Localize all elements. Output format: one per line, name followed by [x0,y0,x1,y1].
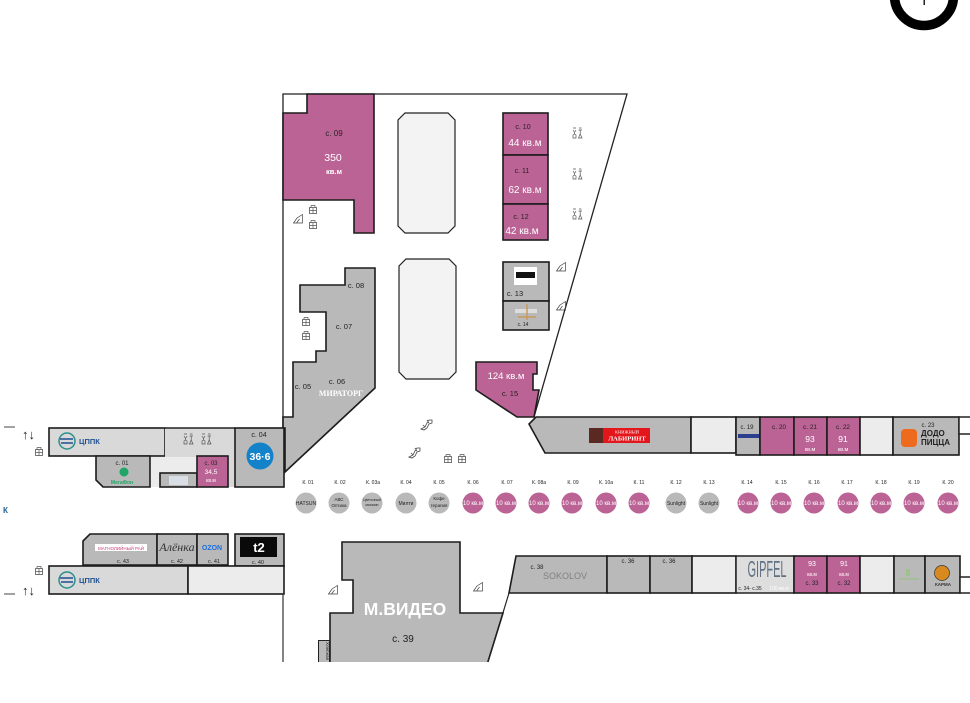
panel: c.34-c.35 Gipfel: 100 кв.м [769,586,789,592]
panel: c.09 [283,94,374,233]
panel: kiosks row: Кофе [433,496,445,501]
panel: kiosks row: 10 кв.м [463,501,483,507]
panel: c.10 [503,113,548,155]
panel: kiosks row: К. 01 [302,480,314,486]
panel: kiosks row: К. 10а [599,480,613,486]
panel: c.11: с. 11 [515,168,529,175]
panel: c.42: с. 42 [171,559,183,565]
building outline [283,94,627,428]
page bottom margin crop [0,662,970,703]
panel: c.41: с. 41 [208,559,220,565]
panel: c.05-c.08 Miratorg [283,268,375,472]
panel: kiosks row: Милти [399,501,414,507]
direction markers [4,427,42,598]
panel: c.23 Dodo Pizza: ДОДО [921,429,945,438]
panel: c.03: 34,5 [205,469,218,476]
panel: c.23 Dodo Pizza: с. 23 [921,423,935,429]
panel: c.33: кв.м [807,572,817,578]
panel: c.32 [827,556,860,593]
panel: c.13 [503,262,549,301]
panel: kiosks row: К. 14 [741,480,753,486]
panel: kiosks row: К. 05 [433,480,445,486]
panel: c.22: 91 [838,434,848,444]
panel: small bakery unit [318,640,330,668]
panel: c.34-c.35 Gipfel [736,556,794,593]
panel: atrium lower [399,259,456,379]
panel: kiosks row: К. 17 [841,480,853,486]
panel: kiosks row: К. 11 [634,480,645,486]
panel: kiosks row: 10 кв.м [871,501,891,507]
panel: kiosks row: 10 кв.м [938,501,958,507]
panel: c.33 [794,556,827,593]
panel: c.32: 91 [840,561,848,568]
panel: c.36 first: с. 36 [621,559,635,565]
wall line right of c.39 [488,593,509,662]
panel: kiosks row: Оптика [331,503,347,508]
panel: Labyrinth store [529,417,691,453]
panel: small bakery unit: Хлебная [325,642,330,661]
panel: c.13: с. 13 [507,289,523,298]
text: section letter: К [3,506,8,515]
panel: c.05-c.08 Miratorg: МИРАТОРГ [319,389,363,398]
panel: c.32: с. 32 [837,581,851,587]
panel: c.36 first [607,556,650,593]
panel: Labyrinth store: КНИЖНЫЙ [615,430,640,434]
panel: c.21: с. 21 [803,424,817,431]
icon: floor number ring [894,0,954,26]
panel: c.43: с. 43 [117,559,129,565]
panel: kiosks row: К. 15 [775,480,787,486]
panel: c.09: 350 [324,152,342,164]
panel: kiosks row: 10 кв.м [904,501,924,507]
panel: c.38 Sokolov: с. 38 [530,565,544,571]
panel: c.12 [503,204,548,240]
panel: c.22: кв.м [838,447,849,453]
panel: c.34-c.35 Gipfel: GIPFEL [748,556,787,582]
panel: c.33: 93 [808,561,816,568]
panel: c.19 [736,417,760,455]
panel: kiosks row: Sunlight [667,501,686,507]
icons: central escalators and lifts [409,420,466,462]
panel: Karma unit: КАРМА [935,582,952,587]
panel: kiosks row: К. 18 [875,480,887,486]
icons: upper hall [294,128,582,340]
panel: lower TsPPK: ЦППК [79,576,100,585]
panel: kiosks row: К. 07 [501,480,513,486]
panel: c.40: с. 40 [252,560,264,566]
panel: upper TsPPK: ЦППК [79,437,100,446]
panel: kiosks row: 10 кв.м [529,501,549,507]
panel: c.39 M.Video: с. 39 [392,634,414,645]
panel: upper light corridor [165,428,235,487]
wall line [282,594,284,662]
panel: c.10: с. 10 [515,124,531,131]
direction markers: ↑↓ [22,583,35,598]
panel: kiosks row: К. 19 [908,480,920,486]
panel: c.21 [794,417,827,455]
panel: c.22: с. 22 [836,424,850,431]
panel: c.39 M.Video: М.ВИДЕО [364,599,446,619]
panel: c.41: OZON [202,545,222,552]
panel: kiosks row: терапия [431,503,448,508]
panel: kiosks row: К. 12 [670,480,682,486]
panel: c.38 Sokolov [509,556,607,593]
panel: c.04: 36·6 [249,451,271,463]
panel: kiosks row: К. 20 [942,480,954,486]
panel: kiosks row: К. 02 [334,480,346,486]
panel: kiosks row: К. 06 [467,480,479,486]
panel: lower TsPPK [49,566,188,594]
panel: kiosks row: 10 кв.м [771,501,791,507]
panel: c.15 [476,362,539,417]
panel: c.43: МАГНОЛИЙНЫЙ РАЙ [98,544,144,551]
panel: c.09: с. 09 [325,129,343,138]
panel: light unit upper [691,417,736,453]
panel: c.10: 44 кв.м [508,138,542,149]
panel: c.03: с. 03 [204,461,218,467]
panel: kiosks row: HATSUN [296,501,316,507]
panel: c.36 second: с. 36 [662,559,676,565]
panel: kiosks row: 10 кв.м [496,501,516,507]
panel: kiosks row: АВС [334,497,344,502]
panel: c.14 [503,301,549,330]
panel: c.40: t2 [253,540,265,555]
panel: c.42: Алёнка [158,540,195,554]
panel: kiosks row: Sunlight [700,501,719,507]
panel: kiosks row: 10 кв.м [738,501,758,507]
panel: c.20: с. 20 [772,424,786,431]
panel: c.42 [157,534,197,565]
panel: c.11: 62 кв.м [508,185,542,196]
panel: c.21: 93 [805,434,815,444]
panel: upper TsPPK [49,428,165,456]
panel: kiosks row: К. 09 [567,480,579,486]
panel: green brand unit [894,556,925,593]
panel: c.12: 42 кв.м [505,226,539,237]
panel: c.39 M.Video [330,542,503,668]
panel: c.02 area [151,457,197,487]
direction markers: ↑↓ [22,427,35,442]
panel: c.21: кв.м [805,447,816,453]
panel: kiosks row: 10 кв.м [596,501,616,507]
panel: c.12: с. 12 [513,214,529,221]
panel: c.05-c.08 Miratorg: с. 08 [348,281,364,290]
panel: c.04: с. 04 [251,432,267,439]
panel: lower light unit [188,566,284,594]
panel: c.15: с. 15 [502,389,518,398]
panel: c.01 [96,456,150,487]
panel: c.15: 124 кв.м [488,371,524,382]
panel: c.19: с. 19 [740,425,754,431]
panel: kiosks row: 10 кв.м [838,501,858,507]
icons: ramps at c.39 [328,582,482,594]
panel: c.11 [503,155,548,204]
panel: light unit lower right [860,556,894,593]
panel: Labyrinth store: ЛАБИРИНТ [608,436,646,442]
panel: c.23 Dodo Pizza [893,417,959,455]
panel: c.09: кв.м [326,167,342,176]
panel: kiosks row: 10 кв.м [629,501,649,507]
panel: cut-off unit upper right [959,417,970,434]
panel: cut-off unit lower right [960,577,970,593]
panel: c.22 [827,417,860,455]
panel: c.20 [760,417,794,455]
panel: kiosks row: 10 кв.м [804,501,824,507]
panel: lower light unit right [692,556,736,593]
panel: c.23 Dodo Pizza: ПИЦЦА [921,438,950,447]
panel: kiosks row: К. 08а [532,480,546,486]
panel: c.03: кв.м [206,478,216,484]
panel: kiosks row: К. 03а [366,480,380,486]
panel: c.03 [197,456,228,487]
panel: light unit right [860,417,893,455]
panel: c.36 second [650,556,692,593]
panel: c.43 [83,534,157,565]
panel: c.05-c.08 Miratorg: с. 05 [295,382,311,391]
panel: kiosks row [296,480,958,514]
panel: kiosks row: 10 кв.м [562,501,582,507]
panel: c.40 [235,534,284,566]
panel: kiosks row: К. 04 [400,480,412,486]
panel: kiosks row: магазин [366,503,379,507]
panel: c.33: с. 33 [805,581,819,587]
panel: atrium upper [398,113,455,233]
panel: c.38 Sokolov: SOKOLOV [543,571,587,581]
panel: Karma unit [925,556,960,593]
panel: kiosks row: К. 13 [703,480,715,486]
panel: c.01: с. 01 [115,461,129,467]
panel: c.04 [235,428,284,487]
panel: c.01: МегаФон [111,480,133,486]
panel: c.14: с. 14 [518,322,529,328]
panel: c.32: кв.м [839,572,849,578]
panel: c.41 [197,534,228,565]
panel: kiosks row: К. 16 [808,480,820,486]
panel: c.05-c.08 Miratorg: с. 07 [336,322,352,331]
panel: c.05-c.08 Miratorg: с. 06 [329,377,345,386]
panel: c.34-c.35 Gipfel: с. 34- с.35 [738,586,762,592]
panel: kiosks row: Цветочный [363,498,381,502]
